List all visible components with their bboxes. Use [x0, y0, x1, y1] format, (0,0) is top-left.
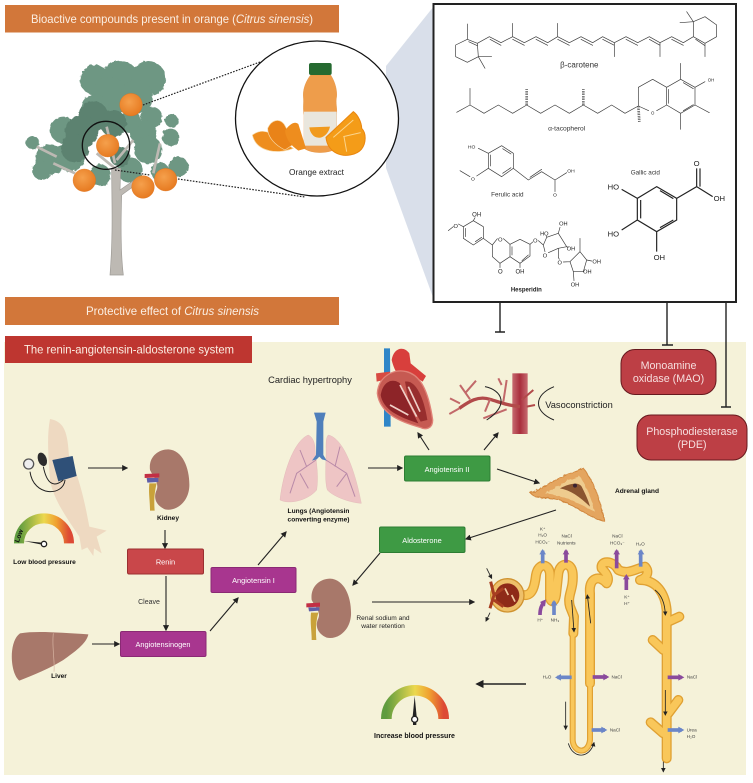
dotted zoom lines — [115, 62, 305, 197]
nephron labels: H⁺ — [537, 618, 544, 623]
nephron labels: NH₃ — [551, 618, 559, 623]
label: vasoconstriction: Vasoconstriction — [545, 400, 613, 410]
enzyme: monoamine oxidase: oxidase (MAO) — [633, 373, 704, 385]
nephron labels: Urea — [687, 728, 697, 733]
heading: protective effect — [5, 297, 339, 325]
molecule: ferulic acid: OH — [567, 169, 575, 175]
nephron labels: H₂O — [687, 734, 696, 739]
arrow: renin to angiotensinogen — [165, 576, 167, 630]
icon: low gauge: Low — [14, 528, 25, 544]
molecule: beta-carotene — [456, 12, 717, 70]
nephron labels: H₂O — [538, 533, 547, 538]
icon: second kidney — [306, 579, 351, 640]
molecule: hesperidin: O — [543, 253, 548, 259]
label: kidney: Kidney — [157, 515, 179, 522]
exchange arrows: blue — [543, 551, 682, 730]
label: increase blood pressure: Increase blood pressure — [374, 733, 455, 740]
molecule: alpha-tocopherol — [457, 63, 714, 133]
molecule: hesperidin: OH — [567, 246, 575, 252]
nephron labels: HCO₃⁻ — [535, 539, 551, 544]
arrow: lungs to angiotensin II — [368, 467, 402, 469]
box: aldosterone: Aldosterone — [402, 536, 442, 545]
molecule: gallic acid: Gallic acid — [631, 169, 660, 176]
label: lungs: converting enzyme) — [288, 516, 349, 524]
box: angiotensinogen: Angiotensinogen — [135, 640, 191, 649]
icon: adrenal gland — [531, 468, 605, 522]
glomerulus — [490, 579, 524, 612]
molecule: hesperidin: OH — [516, 269, 524, 275]
nephron labels: H₂O — [543, 675, 552, 680]
label: liver: Liver — [51, 673, 67, 680]
label: adrenal gland: Adrenal gland — [615, 488, 659, 495]
label: orange extract: Orange extract — [289, 167, 345, 177]
molecule: hesperidin: O — [533, 238, 538, 244]
molecule: hesperidin: OH — [592, 259, 601, 265]
nephron labels: NaCl — [561, 534, 572, 539]
illustration: orange tree — [26, 61, 188, 275]
enzyme: monoamine oxidase — [621, 350, 716, 394]
box: angiotensin I: Angiotensin I — [232, 576, 275, 585]
label: cleave: Cleave — [138, 599, 160, 606]
molecule: ferulic acid — [460, 144, 575, 199]
molecule: alpha-tocopherol: O — [651, 110, 655, 115]
enzyme: monoamine oxidase: Monoamine — [641, 360, 696, 372]
inhibition lines from compounds — [495, 302, 731, 407]
panel: cream RAAS background — [4, 342, 746, 775]
label: low blood pressure: Low blood pressure — [13, 559, 76, 566]
icon: liver — [12, 632, 88, 681]
molecule: hesperidin: O — [453, 224, 458, 230]
nephron labels: K⁺ — [624, 594, 630, 599]
arrow: aldosterone to kidney — [353, 553, 380, 585]
panel: chemical structures box — [434, 4, 736, 302]
nephron labels: NaCl — [687, 675, 697, 680]
nephron labels: Nutrients — [557, 540, 576, 545]
nephron labels: H⁺ — [624, 601, 630, 606]
arrow: nephron to increased pressure — [477, 683, 526, 685]
nephron labels: NaCl — [611, 675, 622, 680]
icon: kidney — [145, 449, 189, 511]
molecule: gallic acid: HO — [608, 230, 619, 239]
molecule: hesperidin — [448, 213, 601, 293]
flow arrows inside nephron — [486, 568, 665, 772]
label: lungs: Lungs (Angiotensin — [288, 508, 349, 515]
nephron labels — [535, 526, 697, 739]
molecule: hesperidin: OH — [571, 283, 579, 289]
molecule: hesperidin: HO — [540, 231, 549, 237]
icon: lungs — [280, 413, 361, 503]
molecule: ferulic acid: O — [553, 193, 557, 199]
molecule: gallic acid: HO — [608, 182, 619, 191]
box: renin — [128, 549, 204, 574]
molecule: hesperidin: OH — [472, 213, 481, 219]
arrow: adrenal to aldosterone — [466, 510, 556, 539]
molecule: ferulic acid: HO — [468, 144, 476, 150]
heading: renin-angiotensin-aldosterone system — [5, 336, 252, 363]
label: lungs — [288, 508, 349, 524]
molecule: alpha-tocopherol: α-tacopherol — [548, 126, 586, 133]
nephron diagram — [486, 526, 697, 772]
molecule: gallic acid: OH — [654, 253, 665, 262]
nephron tubule — [523, 562, 679, 758]
arrow: kidney to renin — [164, 530, 166, 548]
molecule: ferulic acid: O — [471, 177, 475, 183]
arrows: angiotensin II to heart, artery, adrenal — [418, 433, 539, 483]
label: renal retention: Renal sodium and — [356, 615, 410, 622]
nephron labels: HCO₃⁻ — [610, 540, 625, 545]
box: angiotensinogen — [120, 632, 206, 656]
molecule: hesperidin: Hesperidin — [511, 287, 542, 293]
icon: heart — [376, 348, 433, 429]
icon: low gauge — [14, 518, 69, 547]
molecule: gallic acid: OH — [714, 194, 725, 203]
box: angiotensin II — [404, 456, 490, 481]
exchange arrows: purple — [540, 551, 682, 677]
molecule: hesperidin: OH — [559, 221, 568, 227]
box: angiotensin I — [211, 568, 296, 592]
arrow: angiotensinogen to angiotensin I — [210, 598, 238, 631]
molecule: ferulic acid: Ferulic acid — [491, 191, 524, 198]
label: cardiac hypertrophy: Cardiac hypertrophy — [268, 375, 352, 385]
molecule: hesperidin: OH — [583, 269, 592, 275]
enzyme: phosphodiesterase — [637, 415, 747, 460]
callout: orange extract circle — [236, 41, 398, 196]
arrow: angiotensin I to lungs — [258, 532, 286, 565]
molecule: hesperidin: O — [498, 269, 503, 275]
nephron labels: NaCl — [612, 534, 623, 539]
icon: arm with cuff and gauge — [24, 419, 107, 556]
heading: renin-angiotensin-aldosterone system: The renin-angiotensin-aldosterone system — [24, 342, 234, 356]
icon: artery with vasoconstriction — [449, 373, 554, 434]
icon: juice bottle — [252, 63, 365, 155]
box: aldosterone — [380, 527, 465, 552]
arrow: liver to angiotensinogen — [92, 643, 119, 645]
molecule: gallic acid — [608, 159, 725, 262]
enzyme: phosphodiesterase: Phosphodiesterase — [646, 426, 738, 438]
arrow: arm to kidney — [88, 467, 127, 469]
connector: grey-blue zoom wedge — [386, 6, 434, 300]
box: renin: Renin — [156, 558, 175, 566]
label: renal retention — [356, 615, 410, 630]
nephron labels: NaCl — [610, 728, 620, 733]
heading: bioactive compounds — [5, 5, 339, 32]
arrow: kidney to nephron — [372, 601, 474, 603]
heading: protective effect: Protective effect of Citrus sinensis — [86, 304, 259, 318]
nephron labels: K⁺ — [540, 526, 546, 531]
molecule: beta-carotene: β-carotene — [560, 61, 599, 70]
heading: bioactive compounds: Bioactive compounds present in orange (Citrus sinensis) — [31, 12, 313, 26]
molecule: hesperidin: O — [498, 238, 503, 244]
icon: high gauge — [386, 690, 444, 725]
label: renal retention: water retention — [360, 623, 405, 630]
enzyme: phosphodiesterase: (PDE) — [677, 439, 707, 451]
molecule: gallic acid: O — [694, 159, 700, 168]
molecule: hesperidin: O — [557, 260, 562, 266]
box: angiotensin II: Angiotensin II — [425, 465, 469, 474]
molecule: alpha-tocopherol: OH — [708, 78, 714, 83]
nephron labels: H₂O — [636, 541, 645, 546]
